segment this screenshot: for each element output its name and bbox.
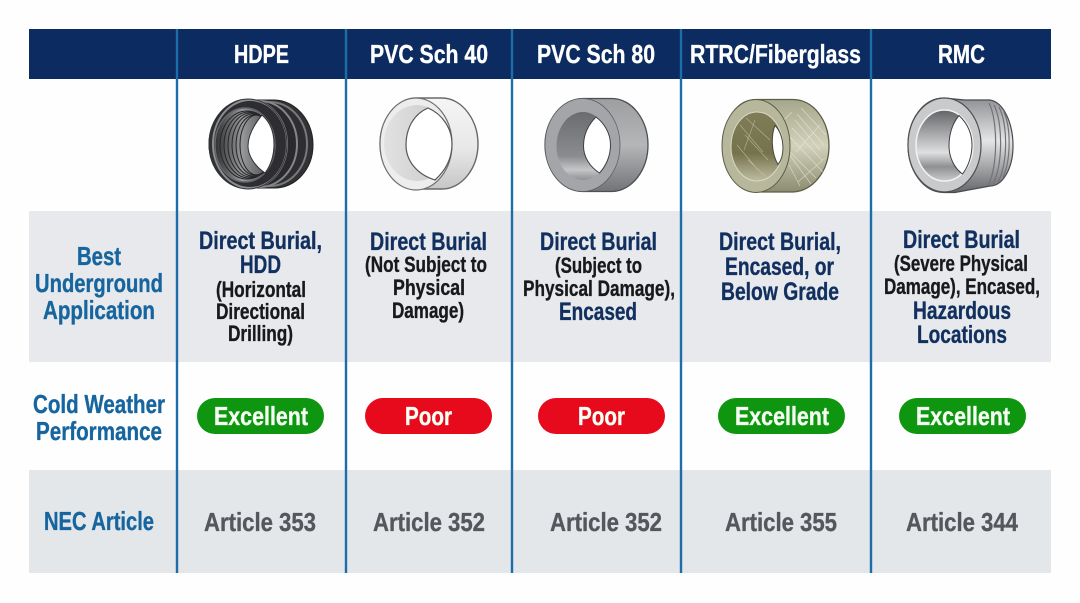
- header: RMC: RMC: [938, 39, 985, 69]
- RTRC application: Below Grade: [721, 278, 839, 306]
- PVC Sch 40 application: [365, 228, 487, 323]
- icon: HDPE corrugated conduit: [209, 99, 313, 189]
- row label: Best Underground Application: Underground: [35, 268, 163, 298]
- RMC application: Hazardous: [913, 297, 1011, 325]
- RMC application: Direct Burial: [903, 226, 1020, 254]
- RTRC application: Encased, or: [725, 253, 834, 281]
- header: PVC Sch 40: PVC Sch 40: [370, 39, 488, 69]
- HDPE application: Drilling): [228, 321, 293, 346]
- column dividers: [177, 29, 871, 573]
- PVC Sch 80 application: (Subject to: [555, 253, 642, 278]
- HDPE application: Direct Burial,: [199, 227, 322, 255]
- icon: RMC threaded steel conduit: [908, 98, 1013, 192]
- PVC Sch 40 application: Damage): [392, 298, 464, 323]
- icon: PVC Sch 80 grey conduit: [545, 98, 648, 192]
- pill: PVC Sch 80 Poor: [538, 398, 665, 434]
- HDPE article: Article 353: [204, 507, 316, 537]
- header: PVC Sch 80: PVC Sch 80: [537, 39, 655, 69]
- RTRC application: [719, 228, 841, 306]
- RTRC application: Direct Burial,: [719, 228, 841, 256]
- header: HDPE: HDPE: [234, 39, 289, 69]
- icon: RTRC fiberglass conduit: [722, 100, 829, 192]
- row band: NEC article: [29, 470, 1051, 573]
- pill: PVC Sch 80 Poor: Poor: [578, 401, 625, 431]
- PVC Sch 80 application: Physical Damage),: [523, 276, 675, 301]
- pill: PVC Sch 40 Poor: Poor: [405, 401, 452, 431]
- row label: NEC Article: NEC Article: [44, 506, 154, 536]
- pill: HDPE Excellent: Excellent: [214, 401, 308, 431]
- RTRC article: Article 355: [725, 507, 837, 537]
- pill: PVC Sch 40 Poor: [365, 398, 492, 434]
- HDPE application: (Horizontal: [216, 277, 306, 302]
- row label: Cold Weather Performance: Cold Weather: [33, 389, 165, 419]
- row label: Best Underground Application: Application: [43, 295, 155, 325]
- pill: RTRC Excellent: Excellent: [735, 401, 829, 431]
- PVC Sch 40 application: Direct Burial: [370, 228, 487, 256]
- row label: Cold Weather Performance: Performance: [36, 416, 162, 446]
- row label: Cold Weather Performance: [33, 389, 165, 446]
- PVC Sch 80 application: Encased: [559, 298, 637, 326]
- PVC Sch 80 application: [523, 228, 675, 326]
- RMC application: Locations: [917, 321, 1007, 349]
- row band: best underground application: [29, 211, 1051, 362]
- RMC application: (Severe Physical: [894, 251, 1028, 276]
- HDPE application: HDD: [240, 251, 281, 279]
- row label: Best Underground Application: Best: [77, 241, 121, 271]
- RMC article: Article 344: [906, 507, 1018, 537]
- PVC Sch 80 application: Direct Burial: [540, 228, 657, 256]
- HDPE application: [199, 227, 322, 346]
- PVC Sch 40 application: Physical: [393, 275, 465, 300]
- RMC application: [884, 226, 1040, 349]
- RMC application: Damage), Encased,: [884, 274, 1040, 299]
- HDPE application: Directional: [216, 299, 305, 324]
- header: RTRC/Fiberglass: RTRC/Fiberglass: [690, 39, 861, 69]
- pill: RMC Excellent: Excellent: [916, 401, 1010, 431]
- icon: PVC Sch 40 white conduit: [380, 98, 478, 190]
- header bar: [29, 29, 1051, 79]
- PVC Sch 40 article: Article 352: [373, 507, 485, 537]
- row label: Best Underground Application: [35, 241, 163, 325]
- PVC Sch 40 application: (Not Subject to: [365, 252, 487, 277]
- PVC Sch 80 article: Article 352: [550, 507, 662, 537]
